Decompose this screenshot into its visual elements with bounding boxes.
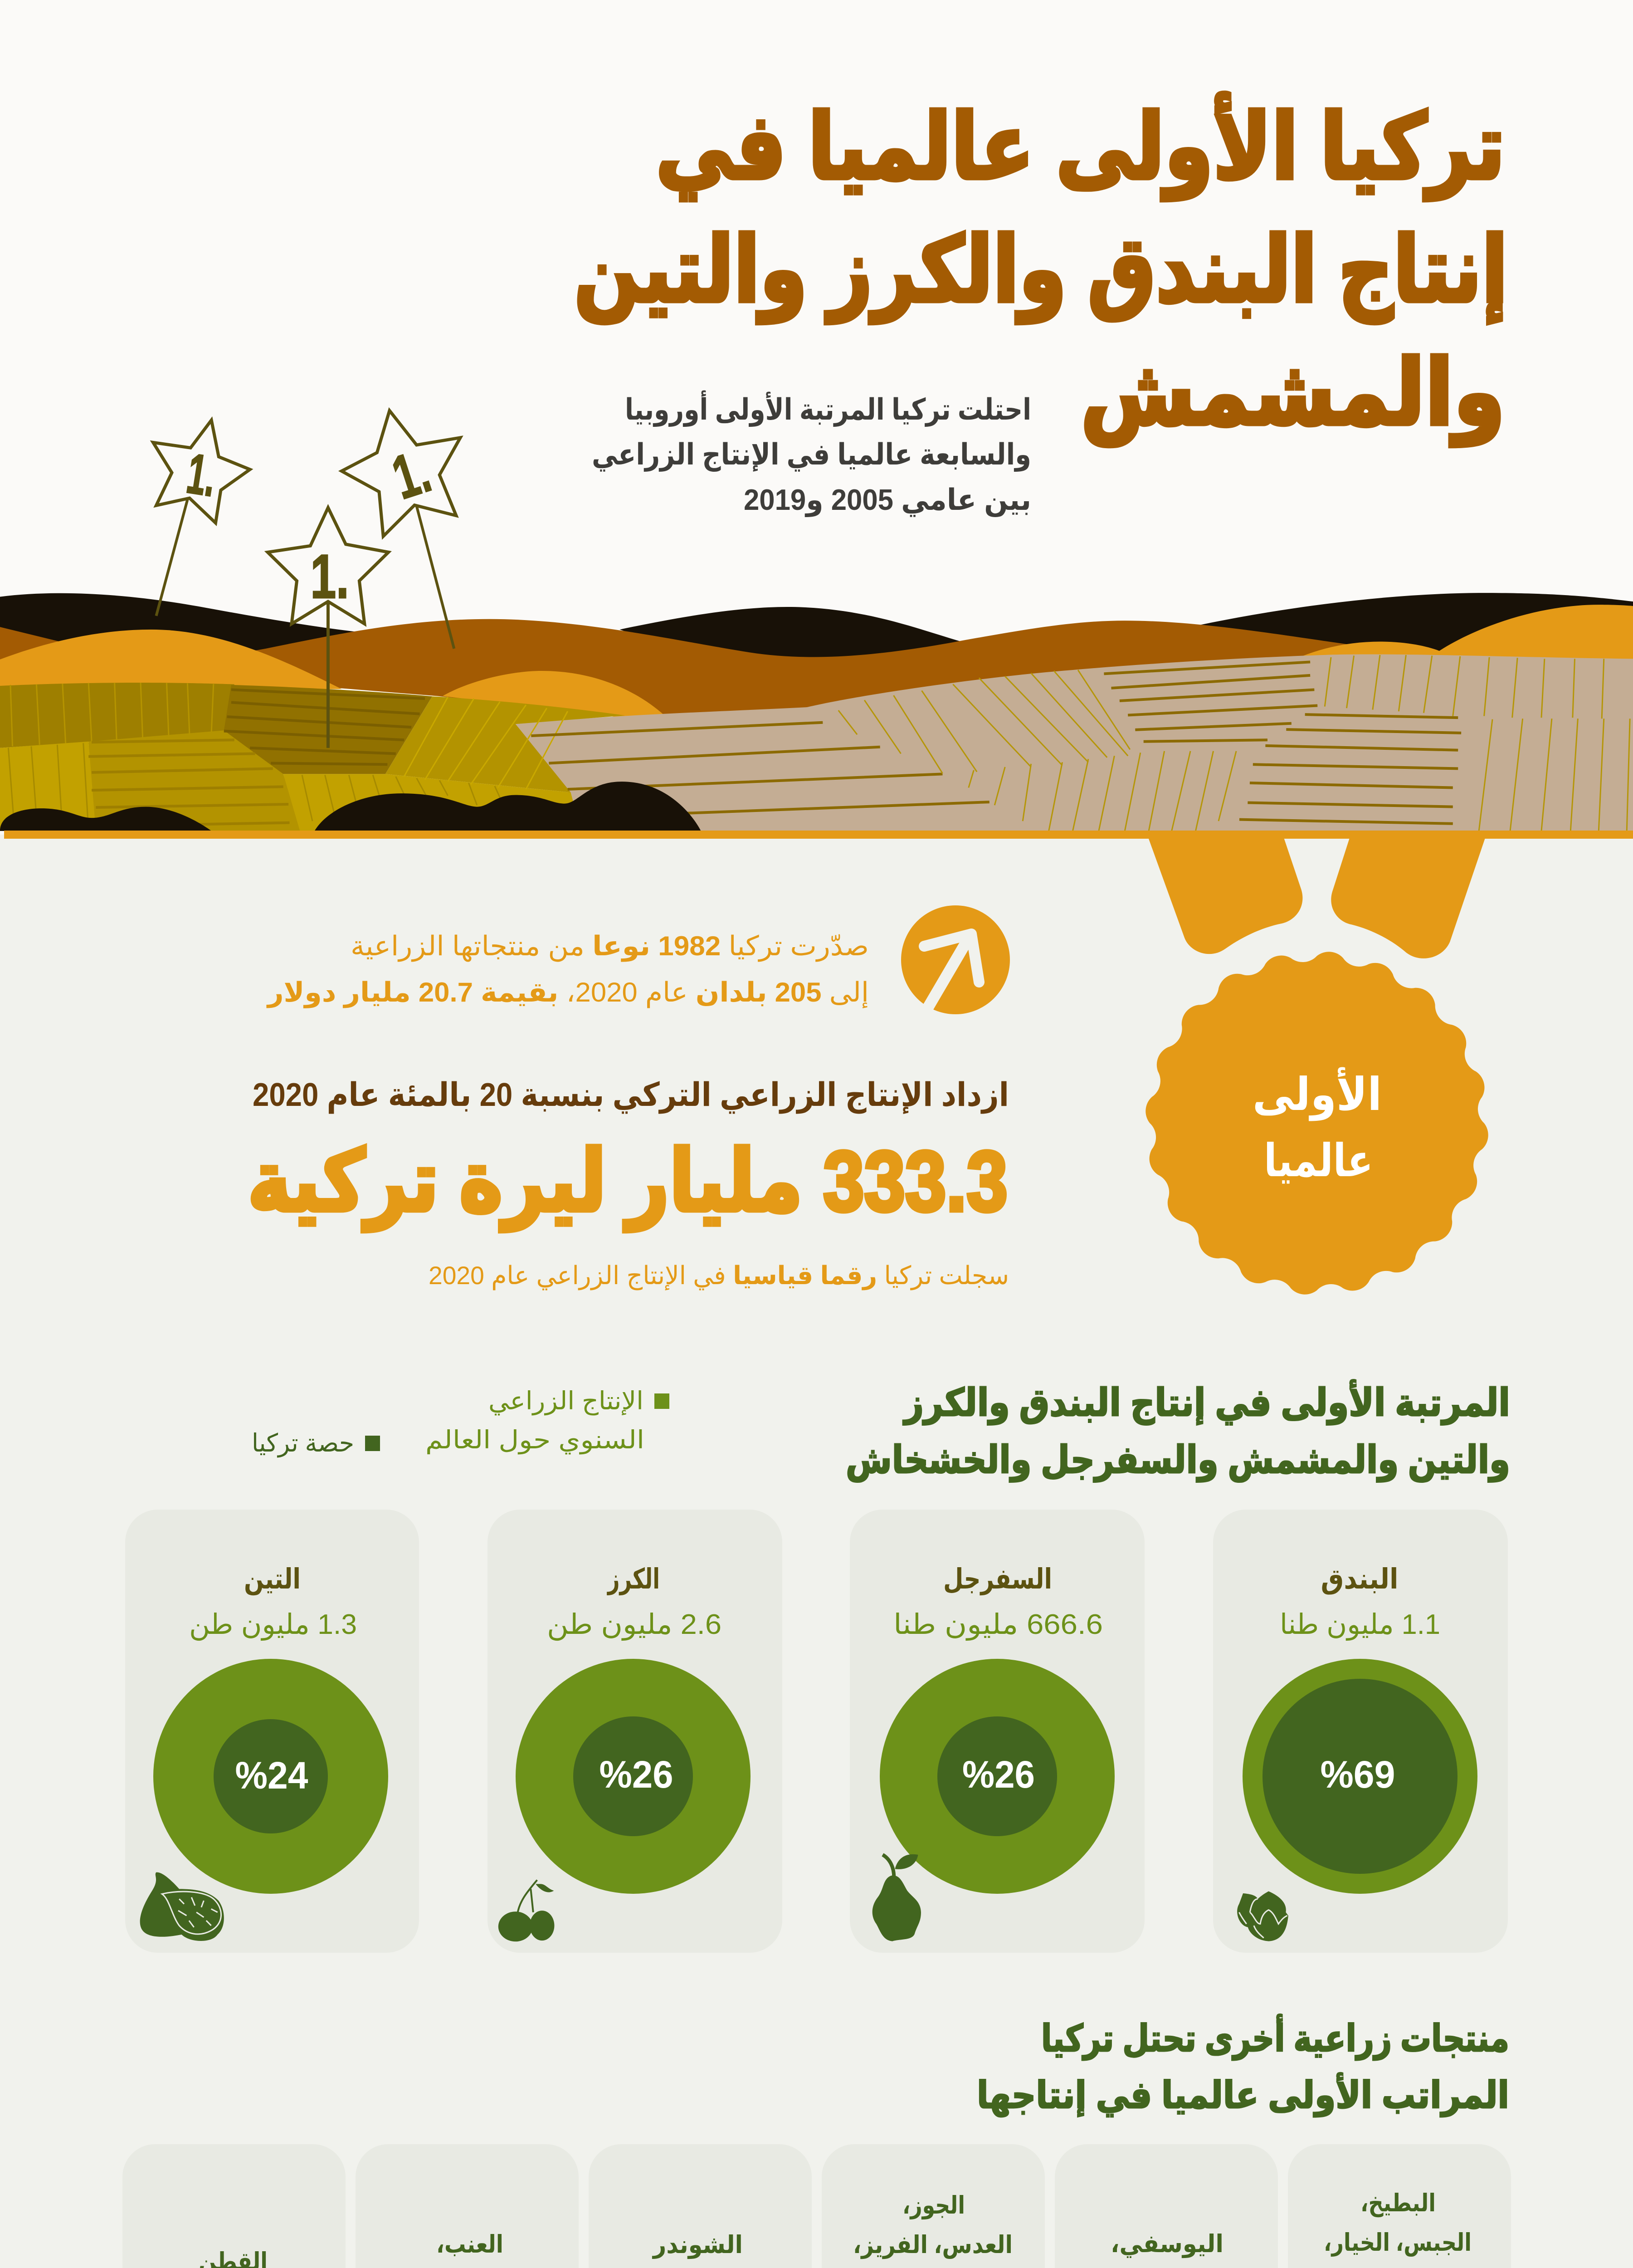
subtitle text: [592, 390, 1031, 517]
panel: fourth place: الجوز،: [902, 2192, 965, 2219]
landscape illustration: [0, 593, 1633, 831]
medal: first in the world: [1146, 836, 1488, 1295]
section heading: first place: [846, 1379, 1510, 1482]
subtitle text: بين عامي 2005 و2019: [744, 483, 1031, 517]
star flag centre: 1.: [310, 542, 349, 611]
star flag right: 1.: [385, 436, 438, 512]
panel: second in the world: البطيخ،: [1360, 2190, 1436, 2217]
title: والمشمش: [1081, 342, 1505, 446]
section heading: other products: [977, 2014, 1509, 2117]
icon: hazelnut: [1237, 1892, 1288, 1941]
card: cherry: 2.6 مليون طن: [547, 1609, 721, 1641]
card: fig: التين: [244, 1564, 301, 1595]
card: hazelnut: [1213, 1510, 1508, 1953]
star flags: [153, 411, 460, 748]
card: hazelnut: البندق: [1321, 1564, 1399, 1595]
card: cherry: الكرز: [607, 1564, 660, 1595]
icon: cherry: [498, 1880, 554, 1941]
subtitle text: احتلت تركيا المرتبة الأولى أوروبيا: [625, 390, 1031, 427]
card: cherry: %26: [600, 1753, 673, 1796]
icon: quince: [873, 1854, 921, 1941]
card: quince: 666.6 مليون طنا: [893, 1609, 1103, 1641]
panel: seventh place: [122, 2144, 346, 2268]
big number: 333.3 مليار ليرة تركية: [248, 1134, 1008, 1232]
card: fig: %24: [235, 1754, 308, 1797]
card: cherry: [487, 1510, 782, 1953]
legend: [252, 1387, 669, 1457]
star flag left: 1.: [183, 442, 220, 508]
export text: صدّرت تركيا 1982 نوعا من منتجاتها الزراعية: [351, 931, 869, 962]
legend item: annual world production: السنوي حول العالم: [425, 1426, 644, 1454]
legend item: Turkey share: حصة تركيا: [252, 1429, 354, 1457]
medal text: [1253, 1067, 1382, 1186]
card: fig: 1.3 مليون طن: [189, 1609, 357, 1641]
card: quince: %26: [962, 1753, 1035, 1796]
medal seal: [1146, 952, 1488, 1295]
section heading: other products: منتجات زراعية أخرى تحتل تركيا: [1041, 2014, 1509, 2060]
panel: third place: اليوسفي،: [1111, 2230, 1224, 2258]
medal text: عالميا: [1264, 1135, 1373, 1186]
section heading: first place: والتين والمشمش والسفرجل والخشخاش: [846, 1438, 1510, 1482]
record note: سجلت تركيا رقما قياسيا في الإنتاج الزراعي عام 2020: [429, 1261, 1009, 1290]
medal text: الأولى: [1253, 1067, 1382, 1121]
card: fig: [125, 1510, 419, 1953]
panel: second in the world: [1288, 2144, 1511, 2268]
medal ribbon: [1149, 836, 1486, 958]
star flag left: [153, 420, 250, 616]
star flag centre: [268, 508, 389, 748]
panel: sixth place: [356, 2144, 579, 2268]
icon: arrow circle: [901, 905, 1010, 1014]
orange ground bar: [4, 831, 1633, 839]
subtitle text: والسابعة عالميا في الإنتاج الزراعي: [592, 438, 1031, 472]
title: [574, 93, 1508, 446]
panel: fourth place: العدس، الفريز،: [853, 2231, 1013, 2259]
statement: production growth: ازداد الإنتاج الزراعي التركي بنسبة 20 بالمئة عام 2020: [253, 1077, 1009, 1114]
export text: [266, 931, 869, 1008]
panel: third place: [1055, 2144, 1278, 2268]
export text: إلى 205 بلدان عام 2020، بقيمة 20.7 مليار دولار: [266, 977, 869, 1008]
icon: fig: [140, 1872, 224, 1941]
section heading: first place: المرتبة الأولى في إنتاج البندق والكرز: [902, 1379, 1510, 1425]
section heading: other products: المراتب الأولى عالميا في إنتاجها: [977, 2072, 1509, 2117]
panel: second in the world: الجبس، الخيار،: [1324, 2229, 1472, 2257]
card: quince: السفرجل: [943, 1564, 1052, 1595]
title: تركيا الأولى عالميا في: [656, 93, 1505, 200]
panel: fifth place: [589, 2144, 812, 2268]
star flag right: [341, 411, 460, 649]
card: quince: [850, 1510, 1145, 1953]
panel: fifth place: الشوندر: [652, 2231, 743, 2259]
panel: fourth place: [822, 2144, 1045, 2268]
card: hazelnut: %69: [1321, 1753, 1395, 1796]
card: hazelnut: 1.1 مليون طنا: [1280, 1609, 1440, 1641]
panel: sixth place: العنب،: [436, 2231, 503, 2258]
legend item: annual world production: الإنتاج الزراعي: [488, 1387, 643, 1416]
legend item: annual world production: [425, 1387, 669, 1454]
